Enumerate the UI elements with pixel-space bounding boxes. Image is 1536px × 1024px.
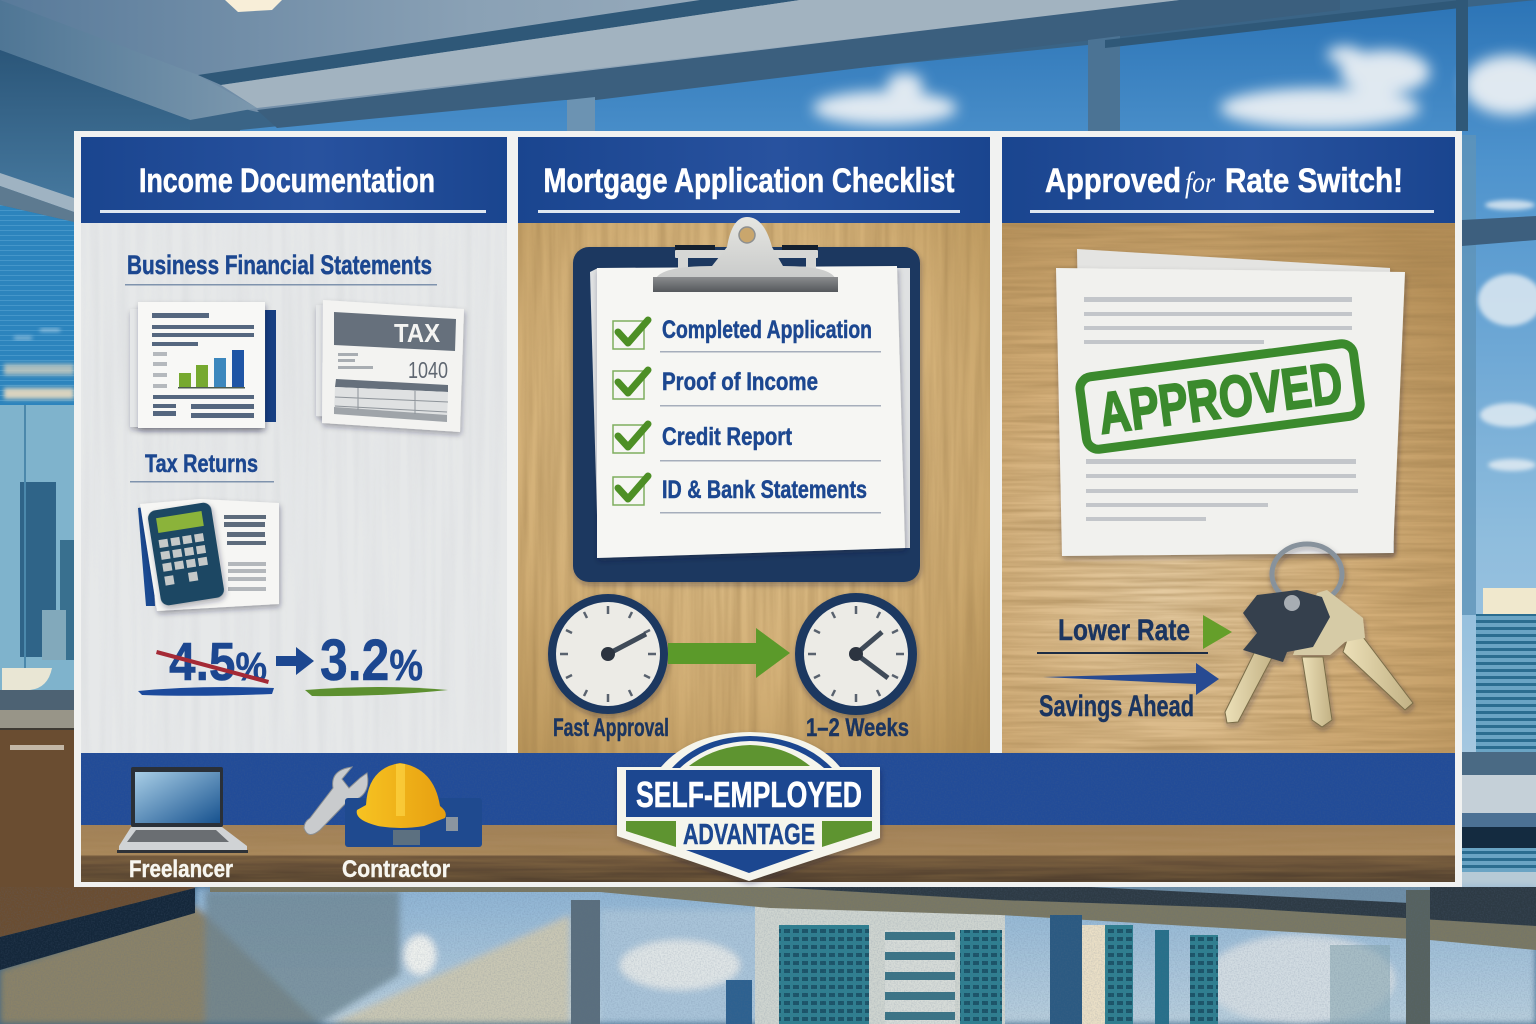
rate comparison: 4.5% to 3.2%: 4.5% bbox=[169, 632, 267, 692]
key right bbox=[1343, 637, 1413, 710]
icon: clock end bbox=[795, 593, 917, 715]
icon: clock start bbox=[548, 594, 668, 714]
white board frame bbox=[74, 131, 1462, 887]
checklist item: id and bank statements bbox=[613, 476, 881, 514]
heading: mortgage application checklist bbox=[518, 137, 990, 223]
subheading: business financial statements: Business Financial Statements bbox=[127, 250, 432, 280]
checklist item: completed application bbox=[613, 316, 881, 352]
checklist item: credit report: Credit Report bbox=[662, 423, 793, 451]
checklist item: proof of income: Proof of Income bbox=[662, 368, 818, 396]
sky through windows bbox=[240, 0, 1536, 900]
key middle bbox=[1302, 657, 1332, 727]
bottom band bbox=[81, 753, 1455, 882]
icon: calculator and document bbox=[138, 499, 279, 611]
approved document bbox=[1056, 249, 1405, 556]
rate comparison: 4.5% to 3.2%: 3.2% bbox=[320, 628, 423, 693]
heading: approved for rate switch: for bbox=[1185, 166, 1215, 199]
label: savings ahead with arrow: Savings Ahead bbox=[1039, 690, 1194, 723]
checklist item: proof of income bbox=[613, 368, 881, 406]
floor reflection bbox=[0, 887, 1536, 1024]
badge: self-employed advantage bbox=[617, 732, 880, 881]
panel: mortgage application checklist bbox=[518, 137, 990, 753]
label: lower rate with arrow bbox=[1037, 614, 1232, 654]
label: savings ahead with arrow bbox=[1039, 663, 1219, 723]
checklist item: credit report bbox=[613, 423, 881, 462]
badge: self-employed advantage: ADVANTAGE bbox=[683, 819, 815, 851]
icon: tax form 1040: TAX bbox=[394, 318, 441, 348]
key dark blade bbox=[1225, 647, 1275, 723]
panel background bbox=[1002, 223, 1455, 753]
panel: income documentation bbox=[81, 137, 507, 753]
icon: wrench, hard hat and toolbox bbox=[304, 763, 482, 847]
arrow: green bbox=[668, 628, 790, 678]
key beige head bbox=[1293, 590, 1365, 655]
label: 1-2 weeks: 1–2 Weeks bbox=[806, 714, 909, 742]
icon: keys bbox=[1225, 544, 1413, 727]
label: fast approval: Fast Approval bbox=[553, 714, 669, 742]
icon: tax form 1040 bbox=[316, 300, 464, 432]
panel: approved for rate switch bbox=[1002, 137, 1455, 753]
heading: income documentation bbox=[81, 137, 507, 223]
panel background bbox=[518, 223, 990, 753]
ceiling bbox=[0, 0, 1180, 112]
label: contractor: Contractor bbox=[342, 856, 450, 883]
heading: mortgage application checklist: Mortgage Application Checklist bbox=[544, 162, 954, 200]
heading: income documentation: Income Documentation bbox=[139, 162, 435, 200]
heading: approved for rate switch: Rate Switch! bbox=[1225, 162, 1403, 200]
key dark head bbox=[1243, 590, 1330, 662]
checklist item: id and bank statements: ID & Bank Statements bbox=[662, 476, 867, 504]
badge: self-employed advantage: SELF-EMPLOYED bbox=[636, 774, 862, 815]
icon: laptop bbox=[117, 767, 248, 853]
heading: approved for rate switch: Approved bbox=[1045, 162, 1181, 200]
label: freelancer: Freelancer bbox=[129, 856, 233, 883]
rate comparison: 4.5% to 3.2% bbox=[138, 628, 448, 696]
subheading: tax returns: Tax Returns bbox=[145, 450, 258, 478]
icon: tax form 1040: 1040 bbox=[408, 357, 448, 383]
icon: financial statement with bar chart bbox=[130, 302, 276, 428]
panel background bbox=[81, 223, 507, 753]
clip bbox=[653, 217, 838, 292]
left window bbox=[0, 173, 74, 212]
window mullions bbox=[567, 97, 595, 131]
checklist item: completed application: Completed Application bbox=[662, 316, 872, 344]
clipboard bbox=[573, 217, 920, 582]
stamp: approved: APPROVED bbox=[1095, 350, 1346, 447]
label: lower rate with arrow: Lower Rate bbox=[1058, 614, 1190, 647]
heading: approved for rate switch bbox=[1002, 137, 1455, 223]
